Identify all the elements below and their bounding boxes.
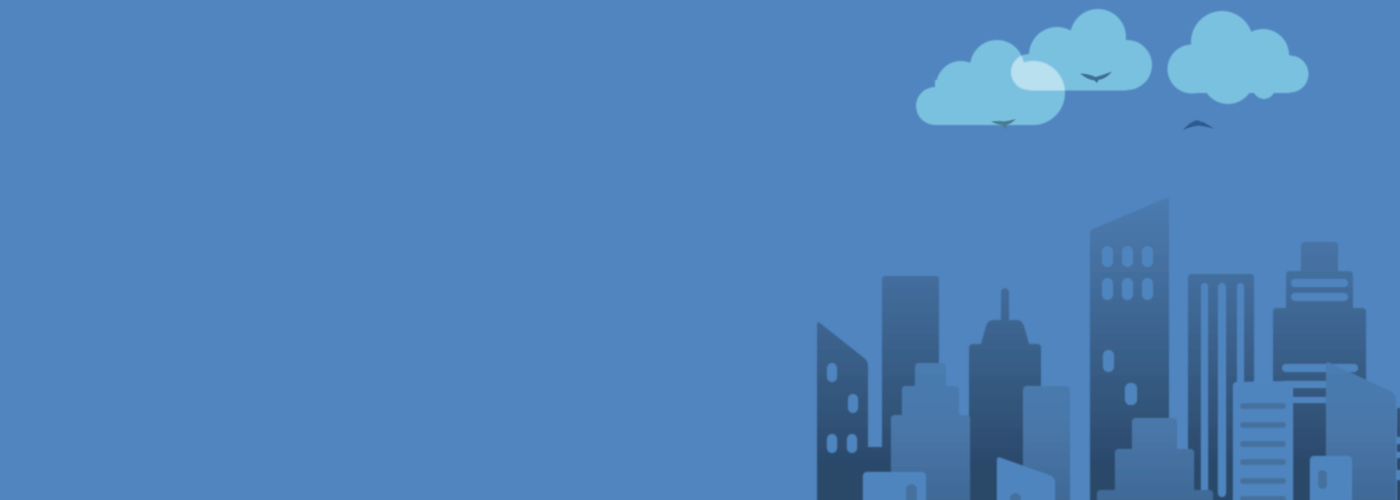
building: stepped left [891,363,970,500]
window: front centre [1010,493,1021,500]
cloud: left [916,40,1065,125]
window: front right [1318,470,1327,489]
building: spire tower [969,288,1041,500]
skyline [817,198,1400,500]
building: front right [1310,456,1352,500]
building: front centre [997,457,1055,500]
cloud: middle [1011,9,1152,90]
building: left slanted [817,322,890,500]
middle buildings [891,362,1396,500]
stripes: right tower [1291,279,1348,287]
building: tall slanted with windows [1090,198,1169,500]
clouds [916,9,1308,125]
illustration: city skyline with clouds and birds [816,8,1400,500]
stripes: stripes building [1201,283,1208,500]
bird: middle cloud [1080,72,1112,83]
window details [827,246,1400,500]
birds [991,72,1214,130]
cloud: right [1168,11,1308,104]
building: stepped centre [1097,418,1213,500]
windows: left building [827,363,837,382]
window: front left [906,484,917,500]
windows: tall slanted building [1102,246,1113,267]
building: striped front [1233,381,1293,500]
building: tall block [882,276,939,500]
building: front left [863,472,926,500]
building: far right edge [1397,408,1400,500]
building: stripes [1188,274,1254,500]
back buildings [817,198,1400,500]
cloud overlap highlight [1010,55,1066,92]
building: mid right of spire [1023,386,1070,500]
building: right tower [1273,242,1366,500]
lines: striped front building [1240,403,1286,409]
stripes: far right edge [1397,437,1400,444]
front light buildings [863,381,1352,500]
bird: lower right [1183,120,1214,130]
building: slanted right [1326,362,1396,500]
bird: left cloud [991,119,1016,130]
front building details [906,403,1327,500]
